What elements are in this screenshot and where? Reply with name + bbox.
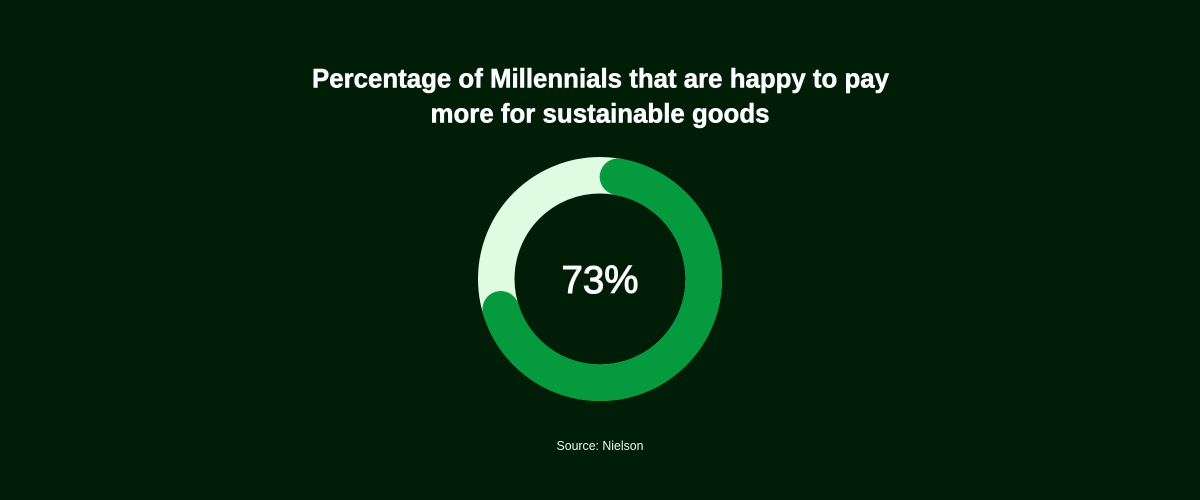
title: Percentage of Millennials that are happy to pay [312, 64, 889, 94]
donut chart: 73% [496, 175, 704, 383]
source note: Source: Nielson [556, 438, 644, 453]
center value: 73% [562, 259, 638, 302]
title: more for sustainable goods [430, 98, 770, 128]
donut track [496, 175, 704, 383]
donut value arc [501, 177, 704, 383]
title [312, 64, 889, 128]
